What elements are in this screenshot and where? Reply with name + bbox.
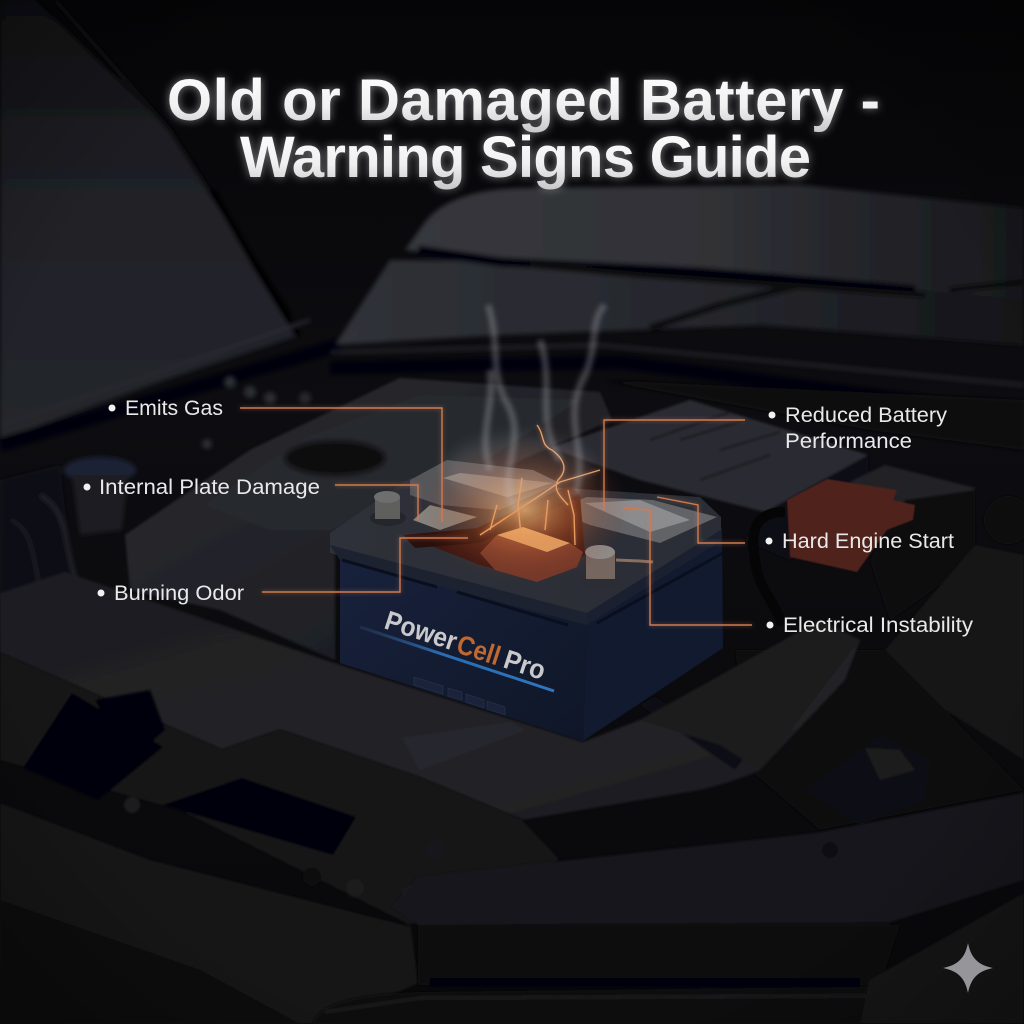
title <box>167 68 880 190</box>
sparks <box>480 425 600 545</box>
black openings and frame <box>0 653 560 1024</box>
red fuse box cover <box>787 479 915 572</box>
battery <box>330 305 723 741</box>
title: Warning Signs Guide <box>240 125 811 190</box>
fire glow <box>420 438 630 582</box>
right lower covers <box>735 496 1024 830</box>
brand label: Power <box>381 605 461 657</box>
windshield and cowl <box>330 185 1024 450</box>
right battery-side box <box>550 400 975 620</box>
exposed damaged plates <box>403 490 585 580</box>
label: Hard Engine Start: Hard Engine Start <box>782 530 954 553</box>
label: Emits Gas: Emits Gas <box>125 397 223 420</box>
connector lines <box>240 408 752 625</box>
upper lid sections <box>410 460 560 510</box>
brand label: Pro <box>500 644 549 686</box>
left components behind cover <box>0 376 311 630</box>
label: Electrical Instability: Electrical Instability <box>783 614 974 637</box>
lower right panel <box>313 793 1024 1024</box>
wiring loom <box>753 512 785 625</box>
battery lid <box>330 478 721 613</box>
spec labels <box>414 677 505 715</box>
lid vents <box>342 553 723 625</box>
label: Internal Plate Damage: Internal Plate Damage <box>99 476 320 499</box>
brand stripe <box>360 627 554 691</box>
title: Old or Damaged Battery - <box>167 68 880 133</box>
label: Reduced Battery Performance: Performance <box>785 430 912 453</box>
icon: sparkle watermark <box>943 943 993 993</box>
brand label: Cell <box>453 629 504 671</box>
brand label <box>381 605 549 686</box>
battery body right face <box>583 528 723 741</box>
label: Reduced Battery Performance: Reduced Battery <box>785 404 948 427</box>
terminal right <box>580 545 653 589</box>
label: Reduced Battery Performance <box>768 404 948 453</box>
label: Burning Odor: Burning Odor <box>114 582 244 605</box>
engine cover <box>125 378 612 660</box>
large front cover with duct <box>0 572 860 820</box>
terminal left <box>370 491 406 526</box>
smoke haze over plates <box>445 435 595 505</box>
open hood panel <box>0 0 340 445</box>
battery body front face <box>340 545 587 741</box>
smoke <box>486 305 605 510</box>
